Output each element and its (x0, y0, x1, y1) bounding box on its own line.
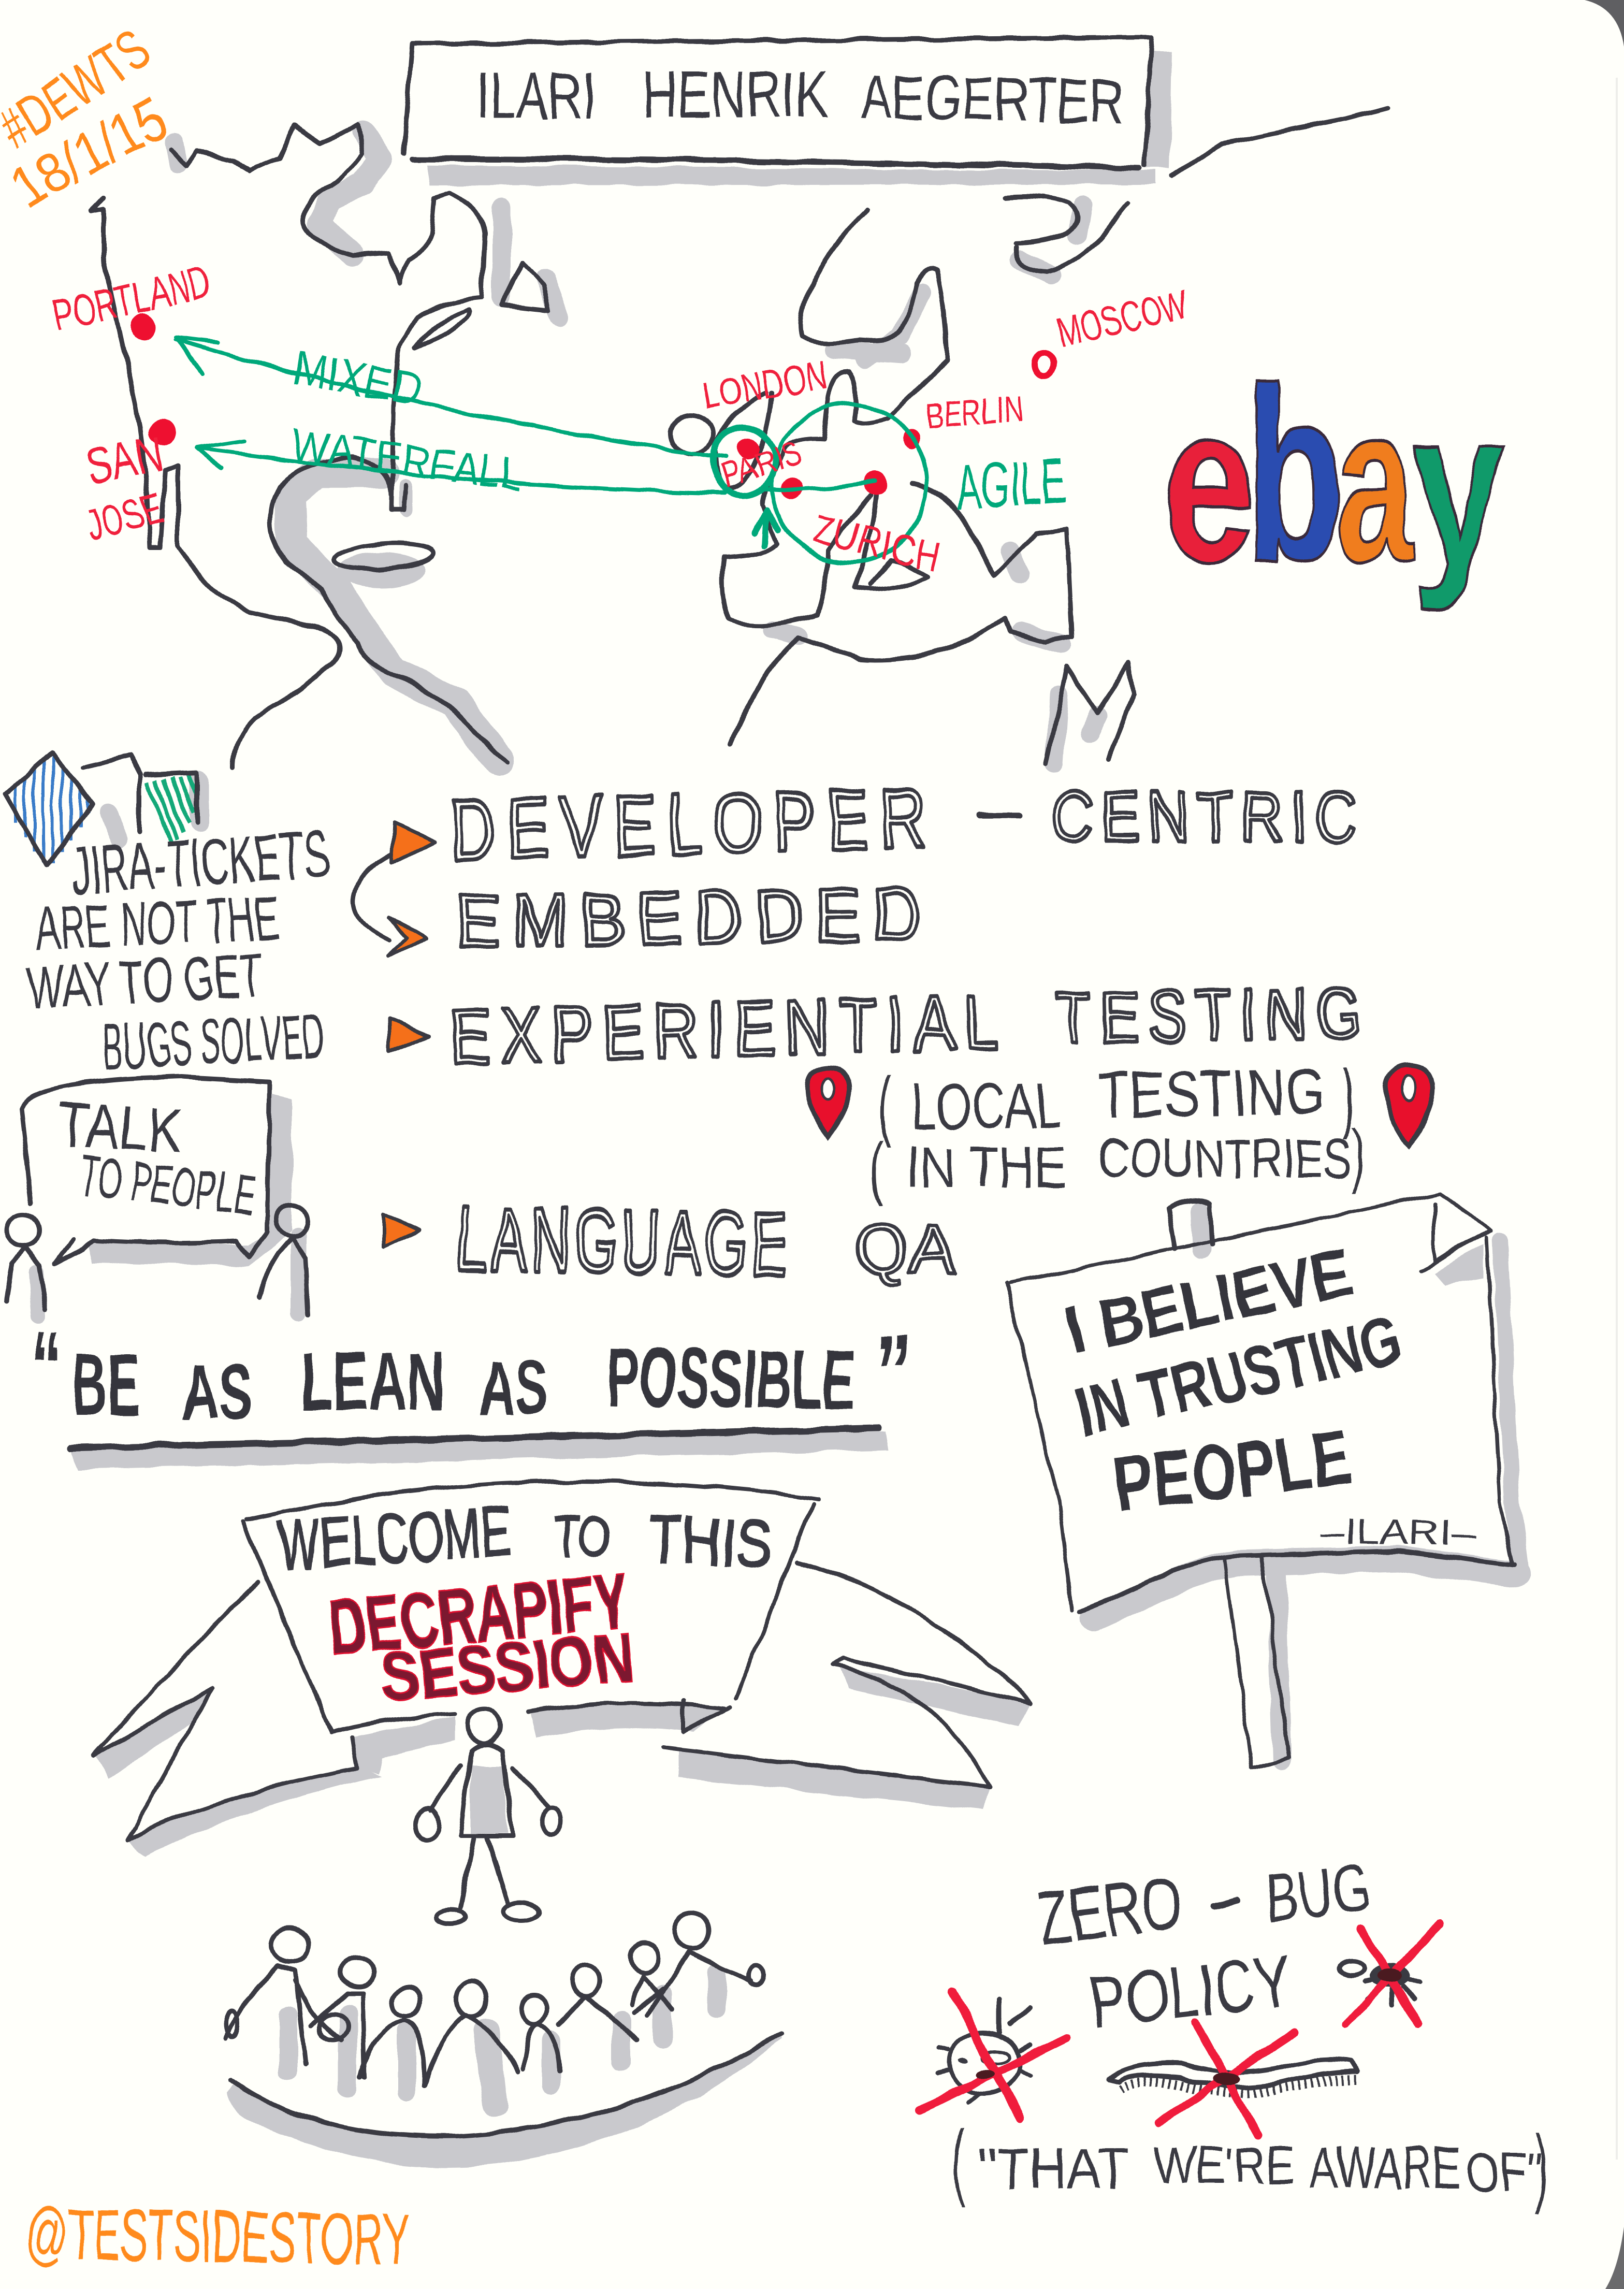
sign shadows (1093, 1211, 1520, 1760)
that we are aware of: OF" (1466, 2142, 1543, 2203)
key points list (354, 770, 1362, 1295)
city labels: BERLIN (924, 388, 1026, 437)
local testing note with map pins (807, 1053, 1434, 1206)
icon: crossed out bugs (920, 1924, 1440, 2136)
talk to people speech bubble: TALK (56, 1089, 184, 1166)
local testing note with map pins: ( (870, 1128, 883, 1206)
local testing note with map pins: COUNTRIES (1098, 1128, 1352, 1189)
banner text: DECRAPIFY (325, 1557, 632, 1671)
city labels: JOSE (81, 483, 169, 550)
green arrows and agile circles (176, 337, 927, 562)
item: developer-centric: DEVELOPER (448, 770, 927, 878)
item: experiential testing: TESTING (1055, 972, 1362, 1059)
item: developer-centric: CENTRIC (1051, 776, 1357, 857)
local testing note with map pins: ) (1342, 1053, 1356, 1140)
city labels: PARIS (716, 433, 806, 495)
sign text: IN TRUSTING (1068, 1300, 1409, 1451)
quote text: LEAN (300, 1335, 445, 1427)
sign board and pole (1007, 1194, 1514, 1769)
ebay logo (1163, 335, 1505, 613)
ebay logo: y (1413, 364, 1505, 613)
item: language qa: QA (854, 1210, 955, 1288)
local testing note with map pins: IN THE (906, 1136, 1067, 1199)
city dots (132, 313, 1053, 499)
jira tickets note (5, 754, 332, 1083)
sign text: I BELIEVE (1059, 1234, 1359, 1368)
text: ) (1535, 2117, 1549, 2215)
zero bug policy (920, 1850, 1549, 2215)
icon: two people (6, 1205, 309, 1314)
city labels: PORTLAND (48, 257, 215, 341)
quote text: AS (181, 1349, 254, 1436)
local testing note with map pins: LOCAL (910, 1069, 1062, 1143)
local testing note with map pins: ( (878, 1061, 891, 1148)
city labels: ZURICH (808, 505, 945, 581)
welcome banner (93, 1482, 1031, 1857)
sign text: –ILARI– (1321, 1511, 1476, 1554)
quote text: ” (875, 1314, 911, 1430)
ebay logo: a (1336, 359, 1415, 608)
underline (70, 1429, 889, 1470)
world map (48, 108, 1388, 768)
icon: map pins (807, 1065, 1434, 1146)
item: developer-centric (448, 770, 1357, 878)
zero bug heading: ZERO (1033, 1860, 1187, 1961)
methodology labels (288, 342, 1067, 524)
item: language qa: LANGUAGE (455, 1187, 789, 1295)
event tag and date: 18/1/15 (1, 85, 178, 221)
methodology labels: WATERFALL (288, 419, 526, 500)
audience shadows (226, 1973, 782, 2167)
title text: AEGERTER (860, 62, 1125, 136)
banner text: WELCOME (276, 1492, 513, 1584)
ebay logo: e (1163, 359, 1256, 608)
people (226, 1913, 763, 2087)
banner text: TO (554, 1505, 611, 1569)
city labels: LONDON (698, 352, 831, 417)
jira text: WAY TO GET (25, 939, 265, 1023)
banner shadows (95, 1665, 1031, 1857)
jira text (25, 815, 332, 1083)
city labels (48, 257, 1193, 581)
item: language qa (455, 1187, 955, 1295)
sign text: PEOPLE (1108, 1413, 1355, 1528)
presenter figure (415, 1709, 561, 1924)
banner text: THIS (647, 1500, 775, 1583)
sign text (1059, 1234, 1476, 1554)
that we are aware of: "THAT (979, 2137, 1129, 2200)
city labels: SAN (81, 425, 168, 496)
quote text (31, 1310, 911, 1436)
zero bug heading: BUG (1263, 1850, 1373, 1936)
stage arc (230, 2033, 782, 2136)
city labels: MOSCOW (1053, 281, 1193, 356)
twitter handle: @TESTSIDESTORY (25, 2192, 410, 2280)
zero bug heading: POLICY (1085, 1939, 1295, 2043)
item: experiential testing (448, 972, 1362, 1081)
orange bullets and curved arrow (354, 816, 1020, 1247)
banner text (276, 1492, 775, 1716)
quote text: “ (31, 1310, 62, 1425)
zero bug heading (1033, 1850, 1373, 2043)
audience and stage (226, 1913, 782, 2167)
event tag and date (0, 17, 178, 221)
methodology labels: MIXED (289, 342, 426, 416)
item: embedded: EMBEDDED (455, 872, 922, 964)
local testing note with map pins: ) (1352, 1115, 1365, 1193)
that we are aware of: ( (952, 2111, 965, 2210)
lean quote (31, 1310, 911, 1470)
banner outline (93, 1482, 1031, 1841)
quote text: AS (479, 1344, 549, 1431)
title text: ILARI (476, 59, 596, 132)
icon: tickets (5, 754, 199, 866)
page corners (1585, 0, 1624, 2289)
title text (476, 57, 1125, 136)
that we are aware of (952, 2111, 1549, 2215)
map shadows (174, 132, 1098, 763)
coastlines (91, 108, 1388, 768)
jira text: BUGS SOLVED (100, 1000, 327, 1083)
protest sign (1007, 1194, 1520, 1769)
banner text: SESSION (378, 1617, 637, 1716)
jira text: ARE NOT THE (34, 883, 280, 963)
title box (404, 37, 1172, 185)
item: experiential testing: EXPERIENTIAL (448, 978, 999, 1081)
that we are aware of: WE'RE (1155, 2136, 1295, 2194)
quote text: POSSIBLE (605, 1330, 856, 1427)
methodology labels: AGILE (954, 445, 1067, 524)
jira text: JIRA-TICKETS (68, 815, 332, 909)
talk to people speech bubble: TO PEOPLE (76, 1143, 259, 1228)
local testing note with map pins: TESTING (1097, 1055, 1326, 1132)
title text: HENRIK (642, 57, 829, 131)
that we are aware of: AWARE (1310, 2135, 1460, 2201)
ebay logo: b (1245, 335, 1344, 613)
quote text: BE (72, 1335, 140, 1433)
talk to people speech bubble (6, 1077, 309, 1316)
